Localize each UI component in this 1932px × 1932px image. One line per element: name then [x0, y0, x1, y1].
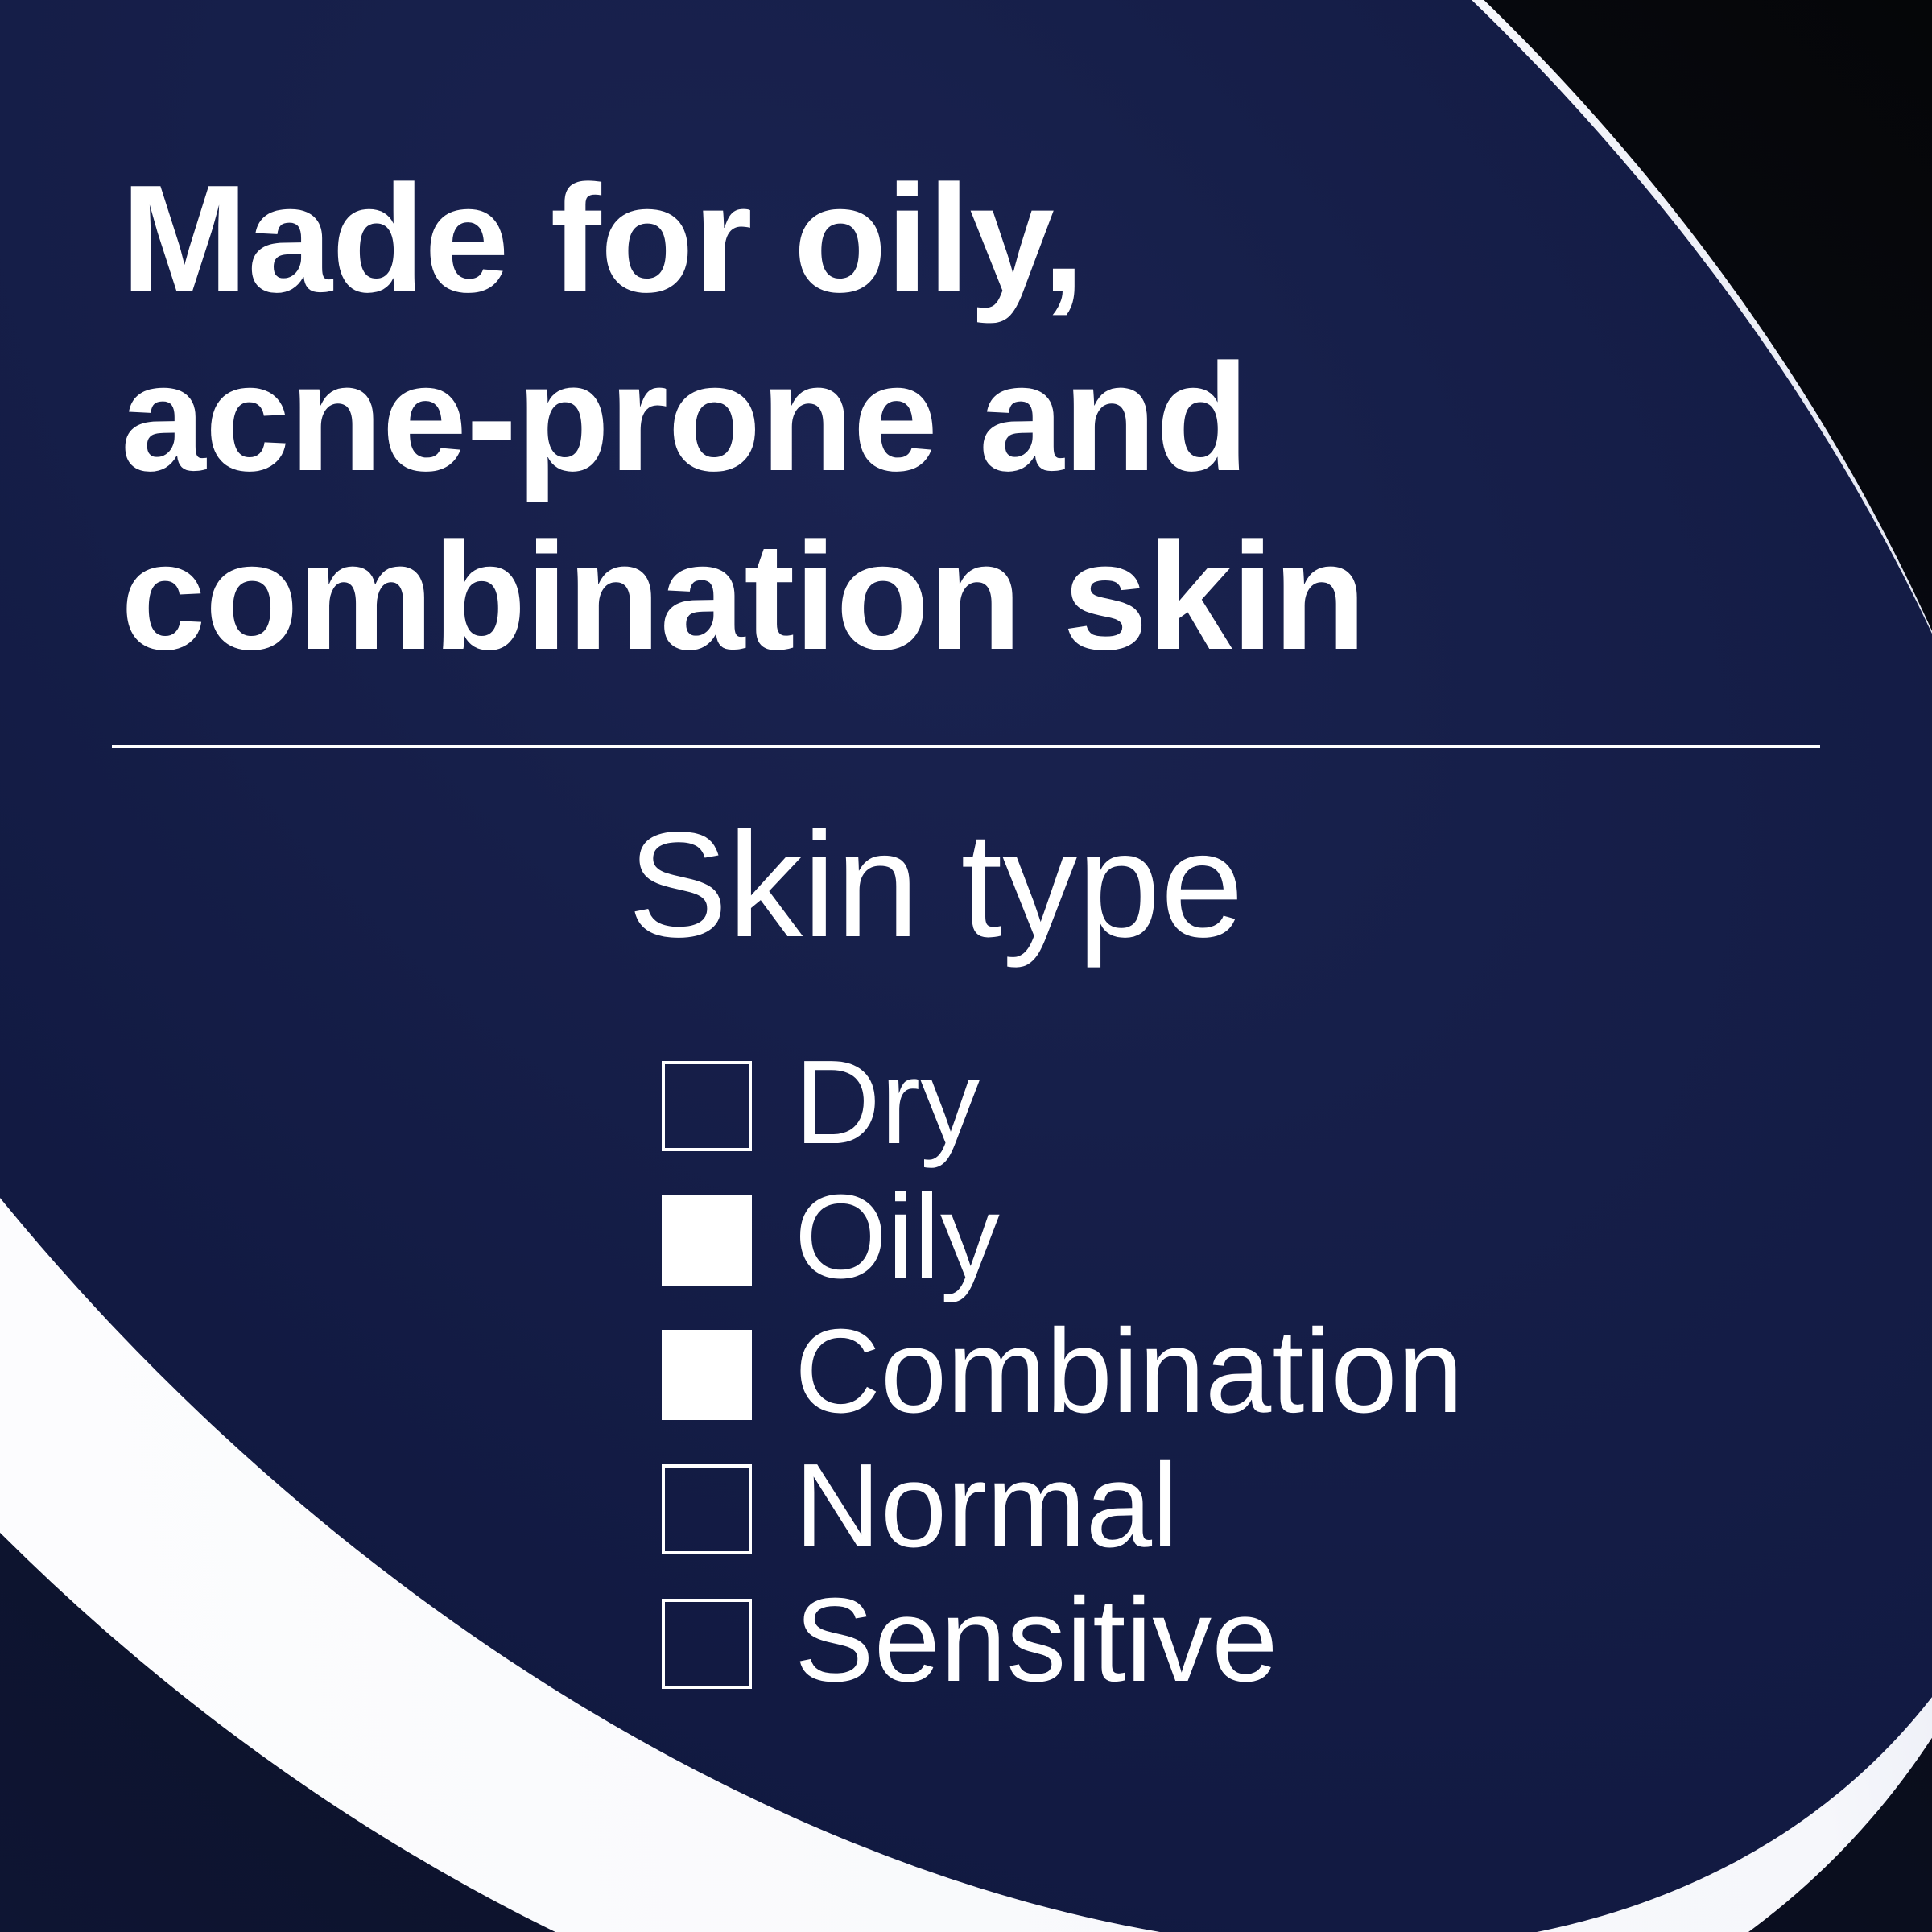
- title: combination skin: [121, 511, 1365, 682]
- item: dry: [662, 1036, 980, 1169]
- checklist: [662, 1036, 1463, 1707]
- item: combination: [662, 1305, 1463, 1438]
- heading: skin type: Skin type: [628, 802, 1244, 968]
- item: oily: [662, 1170, 1000, 1303]
- text: Dry: [795, 1036, 980, 1169]
- title: acne-prone and: [121, 332, 1249, 503]
- text: Oily: [795, 1170, 1000, 1303]
- text: Normal: [795, 1439, 1179, 1572]
- title: [121, 154, 1365, 682]
- text: Combination: [795, 1305, 1463, 1438]
- title: Made for oily,: [121, 154, 1084, 324]
- item: normal: [662, 1439, 1179, 1572]
- text: Sensitive: [795, 1574, 1278, 1707]
- item: sensitive: [662, 1574, 1278, 1707]
